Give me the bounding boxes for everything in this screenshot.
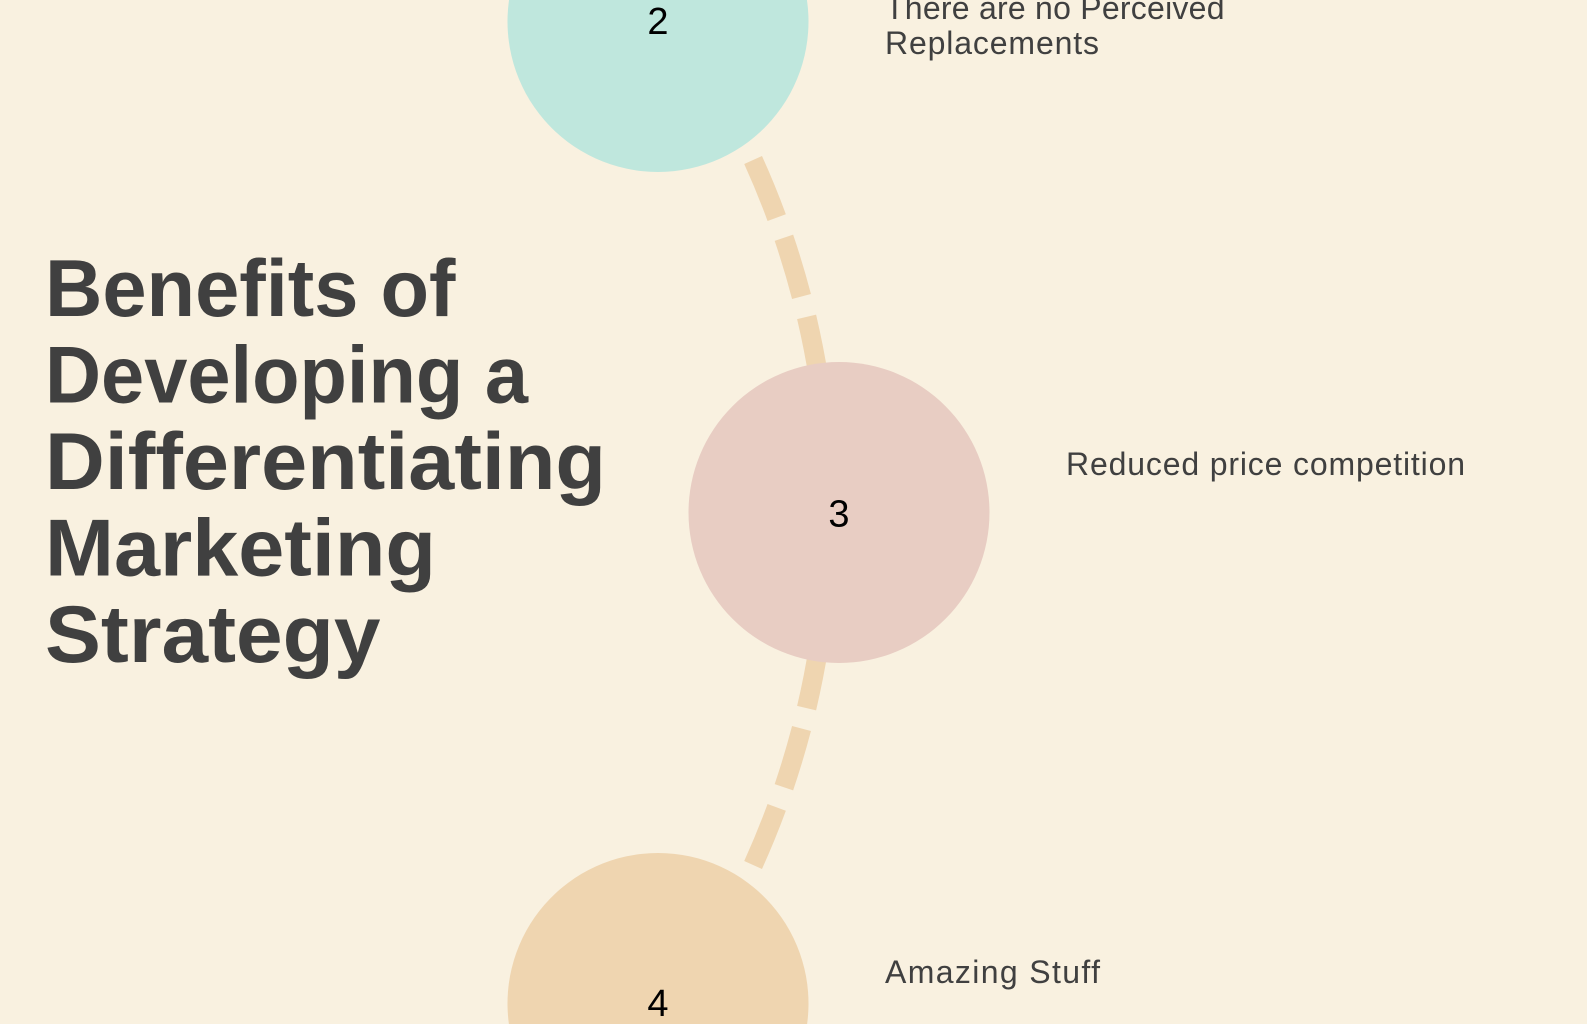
step 3 circle: 3: [828, 494, 850, 536]
connector: dashed arc from circle 2 to circle 3: [753, 160, 819, 379]
title: Developing a: [45, 330, 529, 420]
title: Differentiating: [45, 417, 606, 507]
title: Benefits of: [45, 244, 457, 334]
step 2 label: [885, 0, 1224, 61]
title: Marketing: [45, 504, 436, 594]
step 4 label: Amazing Stuff: [885, 954, 1100, 990]
title: Strategy: [45, 590, 380, 680]
step 4 circle: [507, 853, 808, 1024]
step 3 label: Reduced price competition: [1066, 446, 1465, 482]
step 2 circle: [508, 0, 808, 172]
step 2 circle: 2: [647, 1, 669, 43]
connector: dashed arc from circle 3 to circle 4: [753, 646, 819, 865]
step 2 label: Replacements: [885, 25, 1099, 61]
title: [45, 244, 606, 680]
step 3 circle: [688, 362, 990, 663]
step 4 circle: 4: [647, 983, 669, 1024]
